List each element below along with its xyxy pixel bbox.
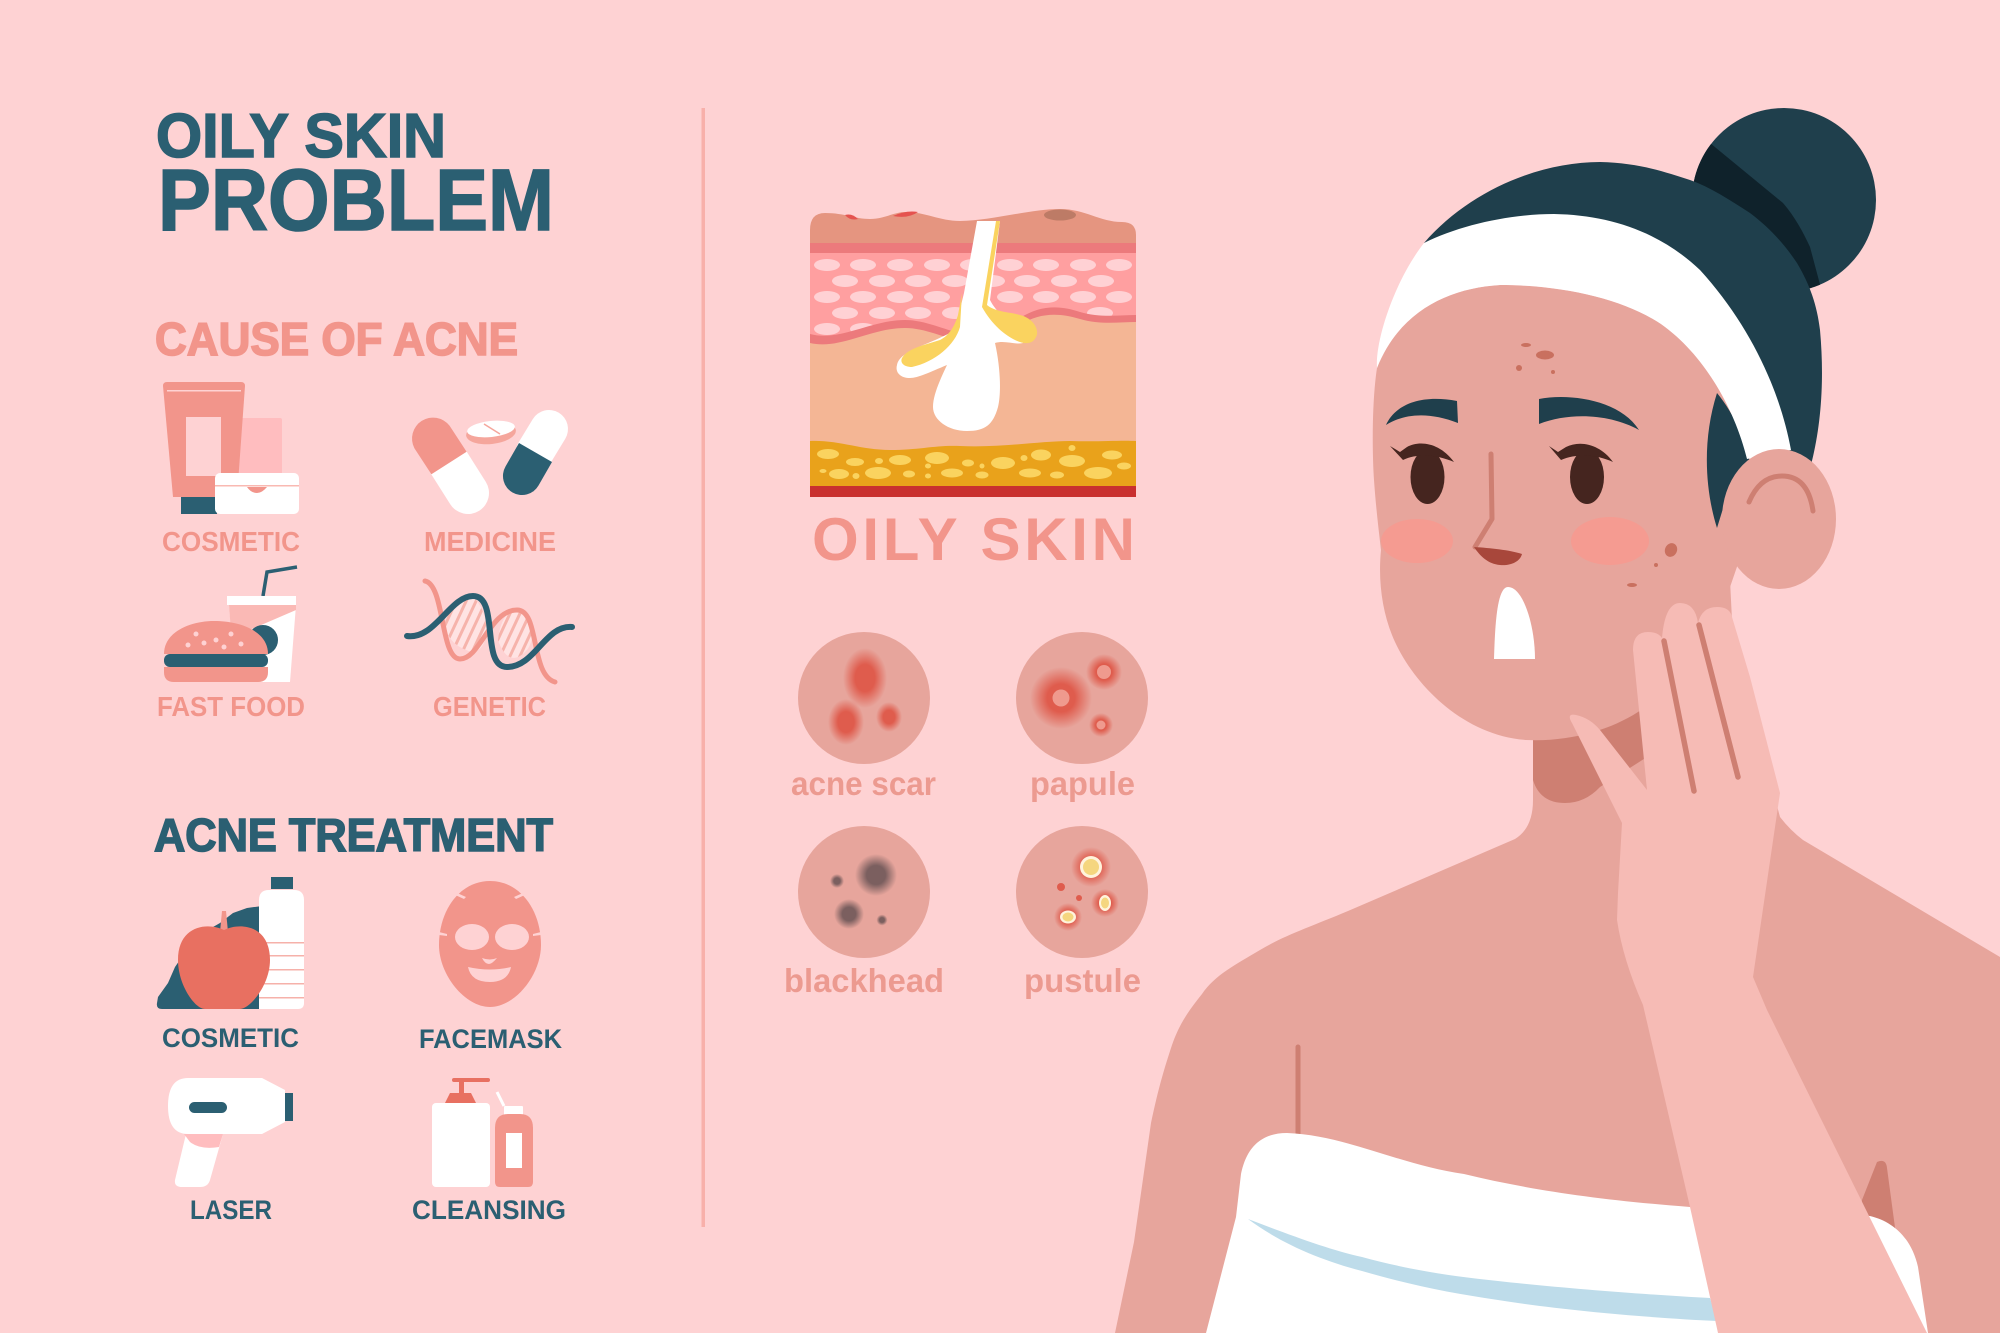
icon: facemask	[439, 881, 541, 1007]
panel: acne types	[784, 632, 1148, 999]
acne scar: acne scar	[791, 765, 936, 802]
towel	[1206, 1133, 1928, 1333]
label: oily skin: OILY SKIN	[812, 506, 1135, 573]
follicle	[897, 221, 1023, 431]
icon: cosmetic products	[163, 382, 299, 514]
icon: cleansing	[432, 1078, 533, 1187]
body	[1115, 580, 2000, 1333]
face	[1373, 285, 1760, 740]
mouth	[1494, 587, 1535, 659]
panel: oily skin diagram	[810, 209, 1136, 573]
acne spots on face	[1516, 343, 1679, 587]
label: facemask: FACEMASK	[419, 1024, 562, 1054]
label: laser: LASER	[190, 1195, 272, 1225]
surface spots	[845, 210, 1076, 220]
title: OILY SKIN	[156, 102, 446, 171]
label: genetic: GENETIC	[433, 691, 546, 722]
hair bun	[1692, 108, 1876, 292]
nose	[1474, 454, 1522, 565]
towel stripe	[1248, 1219, 1717, 1321]
ear	[1722, 449, 1836, 589]
heading: acne treatment: ACNE TREATMENT	[154, 809, 553, 861]
illustration: woman	[1115, 108, 2000, 1333]
label: medicine: MEDICINE	[424, 526, 556, 557]
divider line	[702, 108, 705, 1227]
panel: left column	[154, 102, 572, 1225]
heading: cause of acne: CAUSE OF ACNE	[155, 313, 518, 365]
label: cosmetic treatment: COSMETIC	[162, 1023, 299, 1053]
icon: laser	[168, 1078, 293, 1187]
icon: apple and bottle	[157, 877, 304, 1009]
side hair lock	[1707, 393, 1750, 528]
headband	[1377, 214, 1791, 459]
blackhead	[784, 826, 944, 999]
underarm shadow	[1860, 1161, 1896, 1235]
label: cosmetic: COSMETIC	[162, 526, 300, 557]
strap line	[1296, 1047, 1300, 1133]
acne scar	[791, 632, 936, 802]
eyes	[1390, 444, 1613, 504]
eyebrows	[1386, 397, 1639, 430]
fat layer	[810, 441, 1136, 497]
skin cross-section	[810, 209, 1136, 497]
icon: fast food	[164, 567, 297, 682]
title: PROBLEM	[158, 152, 554, 249]
label: fast food: FAST FOOD	[157, 691, 305, 722]
tan layer	[810, 307, 1136, 497]
title	[156, 102, 554, 249]
neck shadow	[1533, 700, 1647, 803]
bun band	[1694, 144, 1820, 288]
hair	[1424, 162, 1822, 480]
papule	[1016, 632, 1148, 802]
icon: medicine	[412, 418, 552, 495]
papule: papule	[1030, 765, 1135, 802]
icon: DNA	[407, 581, 572, 682]
hand and arm	[1570, 603, 1927, 1333]
blackhead: blackhead	[784, 962, 944, 999]
pustule	[1016, 826, 1148, 999]
blush	[1381, 517, 1649, 565]
label: cleansing: CLEANSING	[412, 1195, 566, 1225]
dermis cells	[814, 259, 1132, 335]
pustule: pustule	[1024, 962, 1141, 999]
